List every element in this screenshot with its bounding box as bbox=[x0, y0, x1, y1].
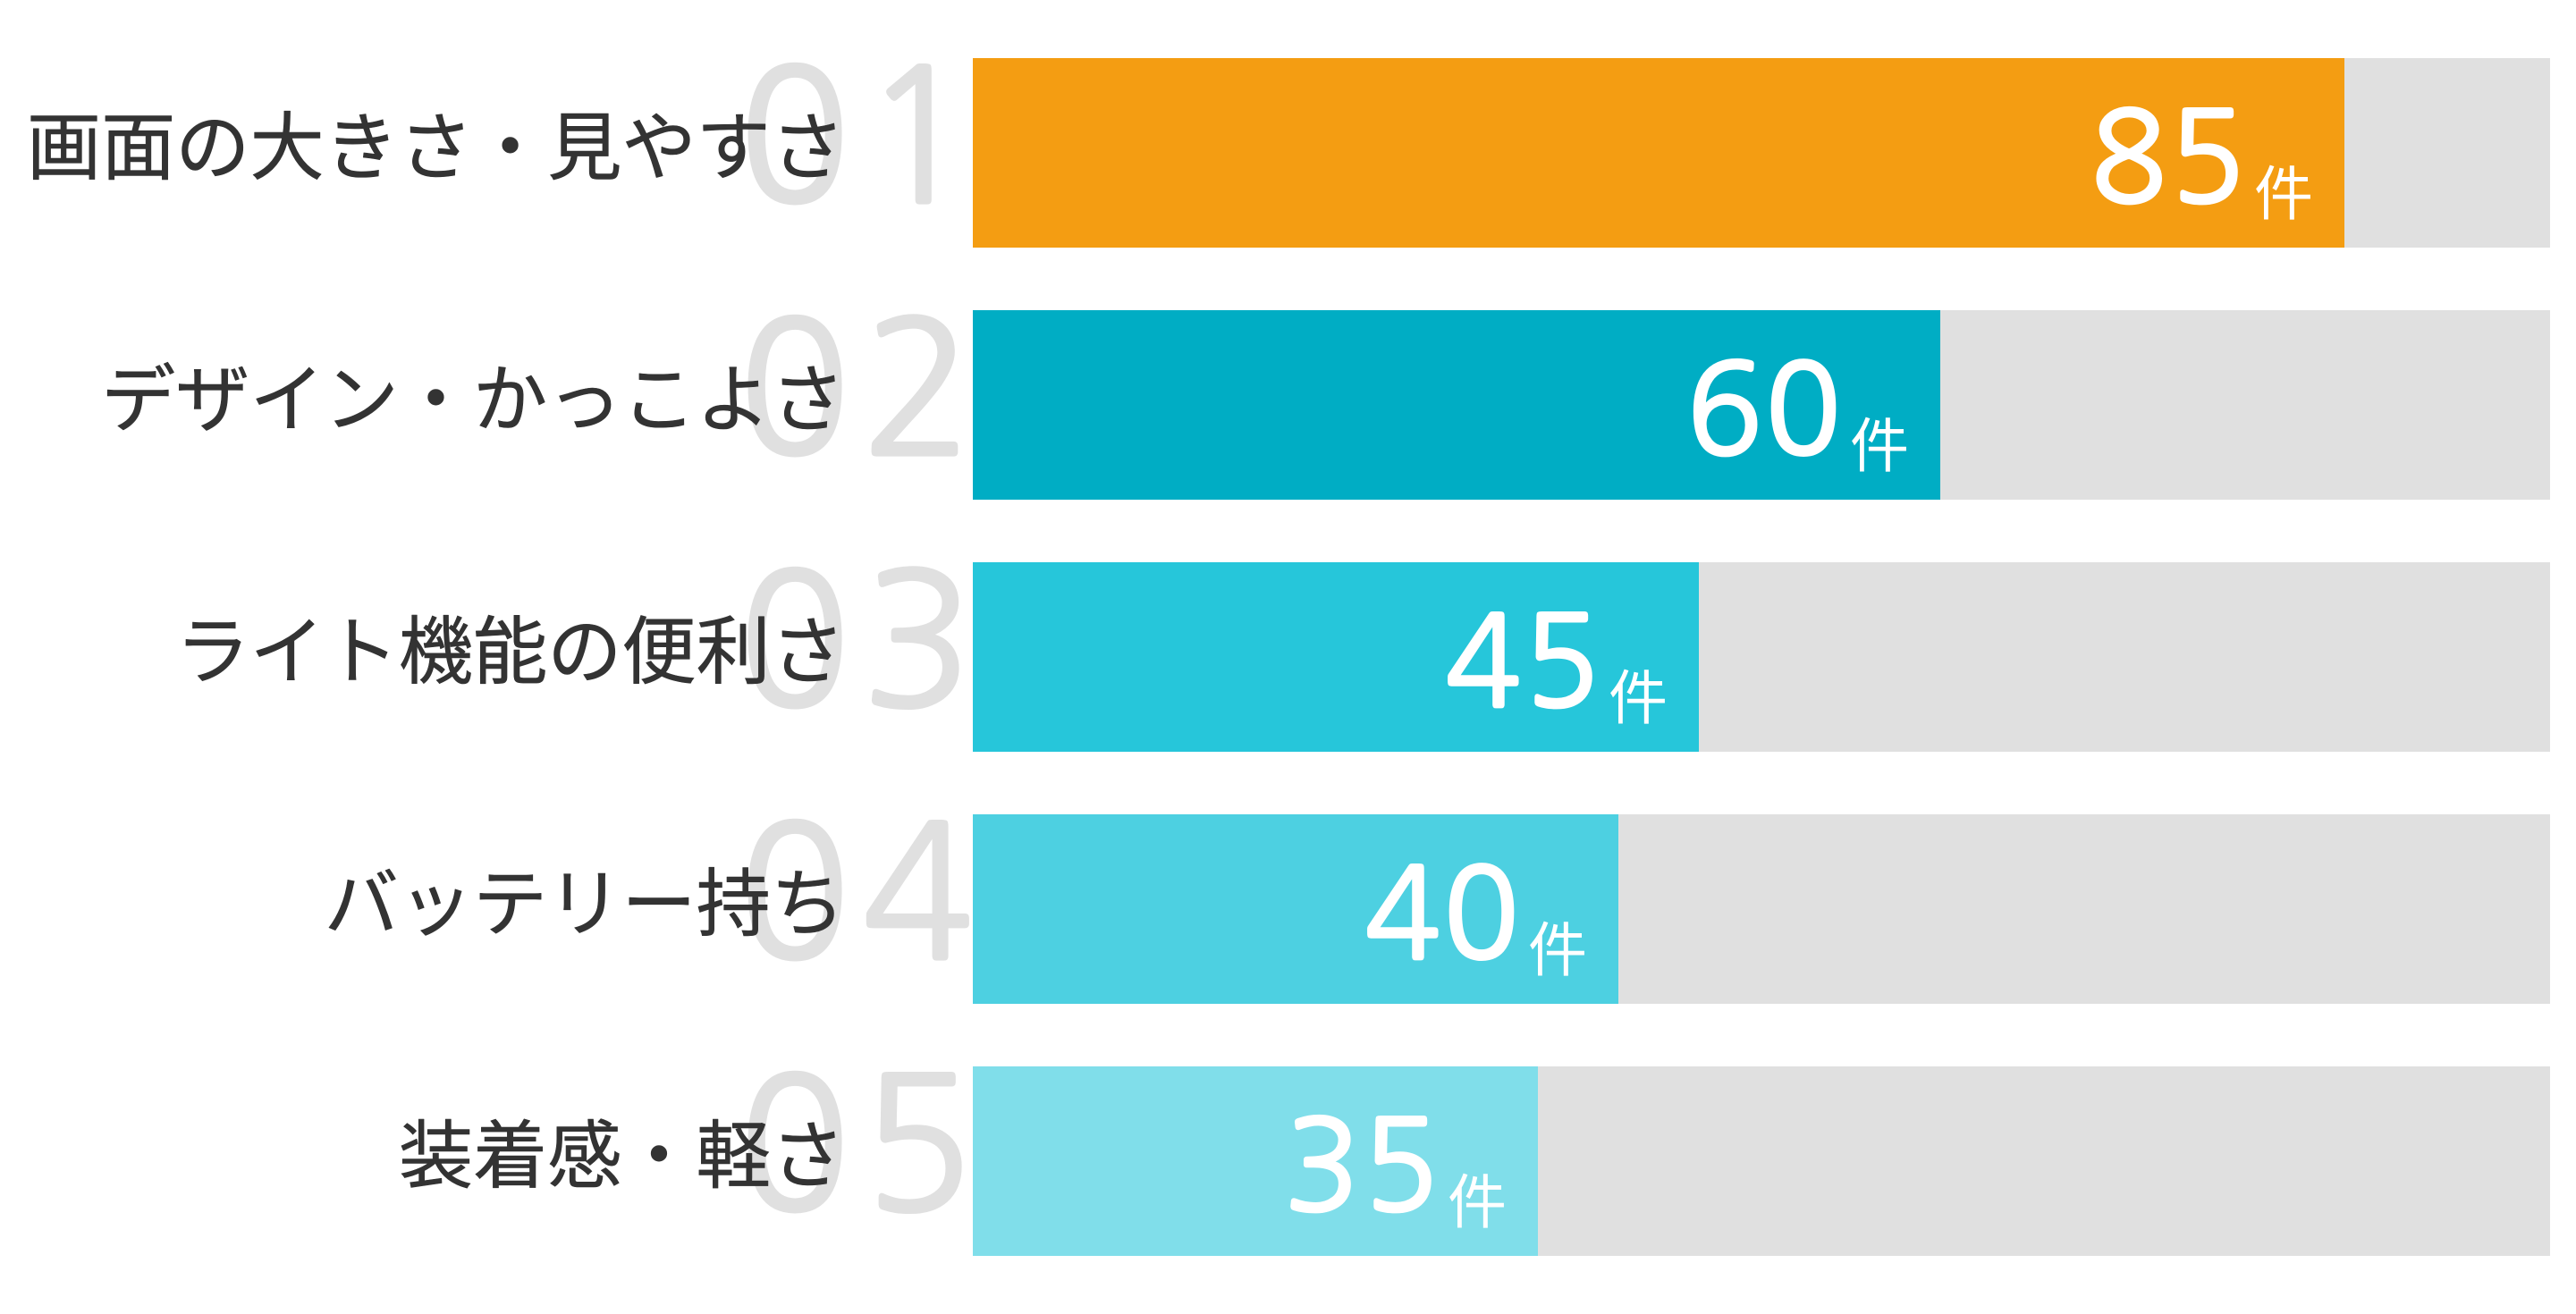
value 60: 60 bbox=[1686, 348, 1844, 473]
unit: 件 bbox=[2254, 147, 2313, 232]
bar value bbox=[973, 1066, 1538, 1256]
bar value bbox=[973, 814, 1618, 1004]
rank number 04: 04 bbox=[739, 801, 985, 985]
bar track bbox=[973, 58, 2550, 248]
value 85: 85 bbox=[2090, 96, 2248, 221]
rank number 01: 01 bbox=[739, 45, 985, 229]
unit: 件 bbox=[1609, 651, 1668, 737]
label: バッテリー持ち bbox=[325, 843, 845, 951]
rank number 03: 03 bbox=[739, 549, 985, 733]
value 35: 35 bbox=[1284, 1104, 1441, 1229]
label: 画面の大きさ・見やすさ bbox=[27, 87, 845, 195]
unit: 件 bbox=[1448, 1155, 1507, 1241]
label: デザイン・かっこよさ bbox=[101, 339, 845, 447]
bar track bbox=[973, 310, 2550, 500]
label: ライト機能の便利さ bbox=[175, 591, 845, 699]
unit: 件 bbox=[1528, 903, 1587, 989]
row 2: design bbox=[101, 297, 2550, 500]
row 1: screen size bbox=[27, 45, 2550, 248]
value 40: 40 bbox=[1364, 852, 1522, 977]
row 3: light function bbox=[175, 549, 2550, 752]
row 4: battery bbox=[325, 801, 2550, 1004]
unit: 件 bbox=[1850, 399, 1909, 484]
label: 装着感・軽さ bbox=[399, 1095, 845, 1203]
rank number 02: 02 bbox=[739, 297, 985, 481]
bar value bbox=[973, 58, 2344, 248]
value 45: 45 bbox=[1445, 600, 1602, 725]
bar track bbox=[973, 562, 2550, 752]
bar track bbox=[973, 814, 2550, 1004]
row 5: comfort bbox=[399, 1053, 2550, 1256]
bar value bbox=[973, 310, 1940, 500]
bar track bbox=[973, 1066, 2550, 1256]
rank number 05: 05 bbox=[739, 1053, 985, 1237]
bar value bbox=[973, 562, 1699, 752]
